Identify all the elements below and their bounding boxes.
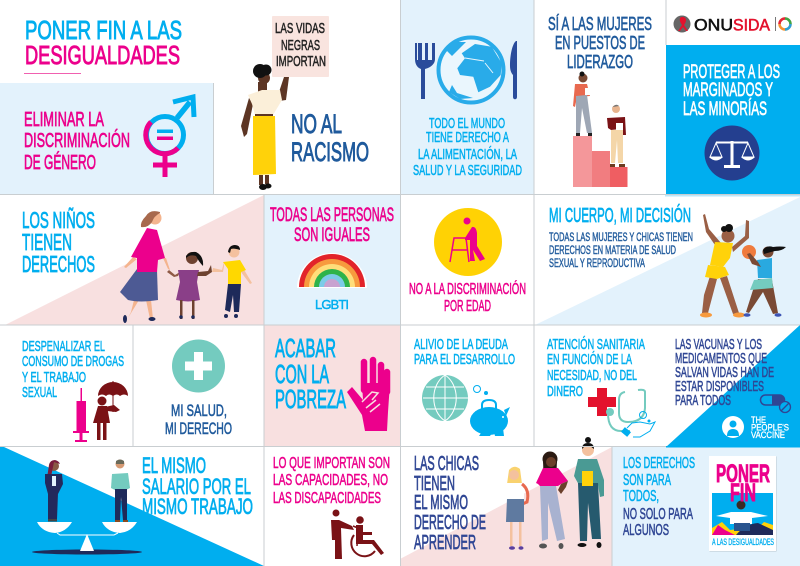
illustration: mother and children — [120, 211, 252, 323]
panel: vaccines — [666, 325, 800, 447]
icon: red cross — [588, 388, 616, 416]
text: sexual and reproductive rights: SEXUAL Y REPRODUCTIVA — [549, 256, 645, 270]
text: right to food: LA ALIMENTACIÓN, LA — [418, 146, 517, 163]
text: debt relief — [414, 336, 515, 368]
heading: children's rights — [22, 207, 95, 277]
protest sign: LAS VIDAS — [275, 20, 325, 37]
label: LGBTI: LGBTI — [315, 297, 349, 312]
text: sexual and reproductive rights: TODAS LAS MUJERES Y CHICAS TIENEN — [549, 230, 693, 244]
text: decriminalize: CONSUMO DE DROGAS — [22, 353, 124, 370]
panel: my body my decision — [535, 195, 800, 325]
text: right to food: TIENE DERECHO A — [426, 129, 509, 146]
text: debt relief: ALIVIO DE LA DEUDA — [414, 336, 508, 353]
title: PONER FIN A LAS — [25, 15, 182, 45]
text: rights for all: SON PARA — [623, 472, 671, 489]
heading: no to racism — [291, 109, 369, 167]
panel: girls' right to learn — [400, 437, 612, 566]
logo: ONUSIDA — [674, 16, 790, 34]
text: sexual and reproductive rights: DERECHOS EN MATERIA DE SALUD — [549, 243, 676, 257]
heading: end poverty — [275, 333, 346, 414]
text: rights for all: NO SOLO PARA — [623, 506, 693, 523]
heading: equal pay: SALARIO POR EL — [142, 474, 251, 499]
text: decriminalize — [22, 338, 124, 401]
text: right to food — [413, 115, 522, 179]
icon: stethoscope and hand — [606, 390, 655, 437]
heading: end poverty: ACABAR — [275, 333, 336, 363]
icon: rainbow — [297, 253, 367, 288]
panel: gender discrimination — [0, 83, 213, 194]
text: debt relief: PARA EL DESARROLLO — [414, 351, 515, 368]
text: healthcare based on need: EN FUNCIÓN DE LA — [547, 351, 632, 368]
heading: girls' right to learn: APRENDER — [414, 532, 476, 554]
panel: children's rights — [5, 195, 264, 325]
heading: children's rights: TIENEN — [22, 229, 72, 255]
icon: globe on a plate with cutlery — [415, 38, 517, 102]
heading: all people are equal: TODAS LAS PERSONAS — [270, 205, 394, 226]
panel: end poverty — [264, 325, 400, 447]
text: healthcare based on need: NECESIDAD, NO DEL — [547, 367, 637, 384]
text: decriminalize: SEXUAL — [22, 384, 57, 401]
panel: no to racism — [241, 16, 369, 190]
heading: all people are equal — [270, 205, 394, 246]
heading: children's rights: DERECHOS — [22, 251, 95, 277]
text: vaccines: PARA TODOS — [675, 392, 731, 409]
report cover: FIN — [730, 479, 756, 507]
text: rights for all: TODOS, — [623, 488, 659, 505]
text: sexual and reproductive rights — [549, 230, 693, 270]
panel: ability not disability — [273, 455, 390, 559]
text: no age discrimination: POR EDAD — [444, 298, 491, 315]
heading: equal pay — [142, 453, 253, 519]
text: my health my right: MI DERECHO — [165, 419, 232, 438]
heading: girls' right to learn: TIENEN — [414, 473, 455, 495]
heading: equal pay: MISMO TRABAJO — [142, 494, 253, 519]
panel: debt relief — [414, 336, 515, 436]
text: ability not disability: LO QUE IMPORTAN SON — [273, 455, 390, 472]
icon: teal globe — [422, 375, 468, 421]
panel: equal pay — [0, 447, 264, 566]
text: my health my right: MI SALUD, — [171, 401, 227, 420]
heading: girls' right to learn — [414, 453, 486, 554]
text: no age discrimination: NO A LA DISCRIMINACIÓN — [409, 279, 526, 298]
heading: my body my decision: MI CUERPO, MI DECISIÓN — [549, 204, 691, 227]
text: ability not disability: LAS DISCAPACIDADES — [273, 490, 381, 507]
text: vaccines — [675, 336, 774, 409]
logo: ONUSIDA: SIDA — [733, 16, 770, 34]
panel: my health my right — [165, 340, 232, 438]
protest sign: IMPORTAN — [276, 53, 326, 70]
heading: protect the marginalized — [683, 62, 780, 120]
text: ability not disability — [273, 455, 390, 507]
icon: woman with umbrella — [93, 381, 128, 440]
panel: right to food — [401, 0, 534, 194]
text: decriminalize: DESPENALIZAR EL — [22, 338, 105, 355]
illustration: balance with woman and man — [32, 460, 142, 554]
text: right to food: SALUD Y LA SEGURIDAD — [413, 162, 522, 179]
icon: syringe — [73, 388, 89, 442]
heading: all people are equal: SON IGUALES — [294, 225, 370, 246]
text: rights for all — [623, 455, 695, 539]
text: rights for all: LOS DERECHOS — [623, 455, 695, 472]
panel: protect the marginalized — [666, 45, 800, 195]
heading: gender discrimination: DISCRIMINACIÓN — [24, 129, 130, 152]
title: DESIGUALDADES — [25, 40, 180, 70]
text: no age discrimination — [409, 279, 526, 315]
logo: The People's Vaccine: VACCINE — [751, 430, 785, 441]
icon: person pushing wheelchair — [331, 510, 384, 559]
icon: gender equality symbol — [146, 97, 194, 177]
heading: gender discrimination: DE GÉNERO — [24, 151, 96, 174]
text: healthcare based on need: ATENCIÓN SANITARIA — [547, 336, 645, 353]
logo: The People's Vaccine: PEOPLE'S — [751, 422, 789, 434]
heading: women in leadership: EN PUESTOS DE — [555, 33, 645, 53]
heading: girls' right to learn: EL MISMO — [414, 492, 468, 514]
text: healthcare based on need — [547, 336, 645, 400]
illustration: girls playing basketball — [700, 214, 786, 318]
icon: piggy bank — [470, 386, 510, 436]
heading: gender discrimination — [24, 109, 130, 174]
heading: end poverty: POBREZA — [275, 384, 346, 414]
heading: women in leadership — [548, 14, 652, 72]
title — [24, 15, 182, 74]
heading: no to racism: NO AL — [291, 109, 342, 139]
icon: person with walker — [434, 208, 502, 276]
panel: all people are equal — [264, 195, 400, 325]
text: decriminalize: Y EL TRABAJO — [22, 369, 86, 386]
protest sign: NEGRAS — [281, 37, 320, 54]
steps and figures — [573, 72, 628, 187]
illustration: three students — [505, 437, 604, 550]
heading: children's rights: LOS NIÑOS — [22, 207, 95, 233]
text: my health my right — [165, 401, 232, 438]
protest sign — [272, 16, 329, 77]
panel: decriminalize — [22, 338, 128, 442]
logo: The People's Vaccine: THE — [751, 415, 766, 426]
heading: girls' right to learn: DERECHO DE — [414, 512, 486, 534]
logo: The People's Vaccine — [722, 415, 789, 441]
panel: healthcare based on need — [547, 336, 655, 437]
text: ability not disability: LAS CAPACIDADES, NO — [273, 472, 388, 489]
panel: no age discrimination — [409, 208, 526, 315]
logo: ONUSIDA: ONU — [694, 16, 733, 34]
text: right to food: TODO EL MUNDO — [429, 115, 505, 132]
woman with sign — [241, 64, 289, 190]
heading: equal pay: EL MISMO — [142, 453, 206, 478]
heading: women in leadership: SÍ A LAS MUJERES — [548, 14, 652, 34]
panel: women in leadership — [548, 14, 652, 187]
heading: gender discrimination: ELIMINAR LA — [24, 109, 104, 131]
icon: scales of justice — [704, 126, 760, 180]
heading: girls' right to learn: LAS CHICAS — [414, 453, 479, 475]
heading: women in leadership: LIDERAZGO — [567, 52, 633, 72]
heading: end poverty: CON LA — [275, 359, 329, 389]
text: healthcare based on need: DINERO — [547, 383, 583, 400]
report cover — [709, 456, 776, 552]
icon: medical cross — [172, 340, 225, 392]
panel: rights for all — [612, 446, 800, 566]
icon: helping hands — [347, 360, 390, 431]
heading: no to racism: RACISMO — [291, 137, 369, 167]
icon: pill — [760, 395, 790, 412]
text: rights for all: ALGUNOS — [623, 522, 669, 539]
